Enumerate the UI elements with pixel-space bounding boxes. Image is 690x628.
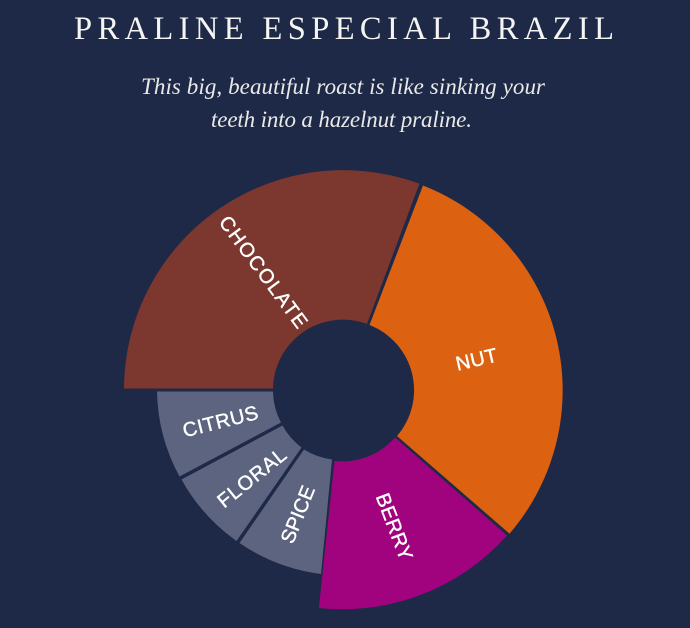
segment: berry	[319, 438, 507, 609]
segment: chocolate: CHOCOLATE	[214, 212, 312, 333]
segment: spice: SPICE	[277, 483, 320, 547]
donut chart: flavor wheel	[124, 170, 563, 609]
segment: berry: BERRY	[371, 490, 416, 563]
title: PRALINE ESPECIAL BRAZIL	[74, 11, 614, 47]
segment: floral	[182, 426, 302, 541]
segment: spice	[240, 450, 332, 574]
segment: citrus: CITRUS	[181, 402, 261, 442]
segment: chocolate	[124, 170, 419, 388]
segment: floral: FLORAL	[213, 444, 291, 513]
segment: nut: NUT	[454, 345, 500, 376]
subtitle: This big, beautiful roast is like sinking your	[141, 74, 546, 99]
subtitle: teeth into a hazelnut praline.	[211, 107, 472, 132]
subtitle	[141, 74, 546, 132]
segment: nut	[370, 186, 563, 534]
segment: citrus	[157, 392, 281, 476]
